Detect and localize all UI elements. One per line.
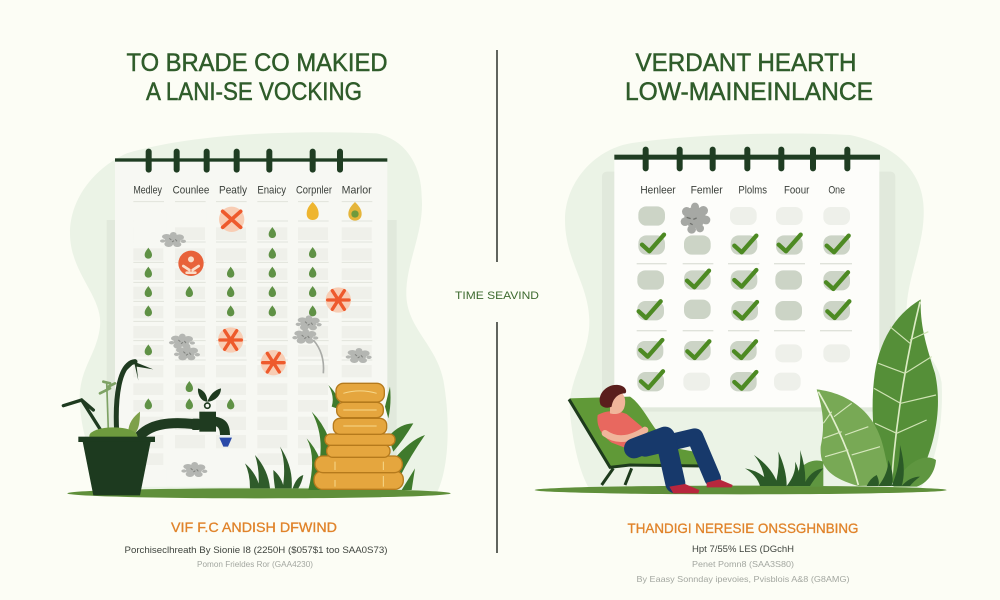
calendar column headings — [133, 185, 372, 197]
grass tufts — [745, 445, 920, 486]
title: left panel — [126, 49, 388, 106]
potted plant — [63, 361, 155, 495]
caption: left panel: Pomon Frieldes Ror (GAA4230) — [197, 559, 313, 569]
calendar column headings: Femler — [691, 185, 723, 197]
calendar column headings: One — [828, 185, 845, 197]
ground — [535, 486, 947, 494]
grey weed on calendar — [681, 203, 710, 234]
calendar page — [115, 160, 387, 487]
background blob — [70, 132, 448, 493]
panel: right low-maintenance scene — [535, 133, 947, 494]
yellow warning drops — [307, 202, 362, 221]
calendar column headings: Foour — [784, 185, 810, 197]
reclining person on lounger — [569, 385, 733, 493]
neck and face — [610, 392, 625, 414]
shirt — [597, 411, 645, 448]
grass tuft — [245, 447, 303, 488]
title: right panel — [625, 49, 873, 106]
calendar spiral bar — [115, 149, 387, 173]
title: left panel: TO BRADE CO MAKIED — [126, 49, 388, 77]
calendar column headings: Corpnler — [296, 185, 332, 197]
centre label: TIME SEAVIND — [455, 290, 539, 302]
title: left panel: A LANI-SE VOCKING — [146, 78, 362, 106]
calendar back sheet — [107, 220, 397, 483]
water tap and pipe — [138, 388, 233, 447]
stack of coins — [314, 383, 403, 489]
row dividers — [637, 264, 852, 331]
calendar column headings: Medley — [133, 185, 162, 197]
calendar column headings: Counlee — [173, 185, 209, 197]
water drops — [145, 227, 316, 409]
calendar page — [614, 157, 879, 407]
calendar grid cells — [133, 202, 375, 487]
calendar column headings: Plolms — [738, 185, 767, 197]
low bush — [793, 457, 936, 487]
small leaf — [817, 389, 892, 486]
lounger cushion — [569, 397, 704, 468]
centre divider — [496, 50, 498, 553]
green check marks — [639, 235, 849, 389]
calendar column headings: Peatly — [219, 185, 247, 197]
grass behind coins — [307, 385, 425, 490]
calendar spiral bar — [614, 147, 880, 171]
calendar back sheet — [602, 172, 895, 412]
caption: left panel: VIF F.C ANDISH DFWIND — [171, 520, 337, 535]
caption: right panel: Hpt 7/55% LES (DGchH — [692, 544, 794, 555]
calendar column headings: Henleer — [640, 185, 676, 197]
lounger frame — [569, 399, 703, 485]
shoes — [669, 479, 733, 493]
caption: right panel: By Eaasy Sonnday ipevoies, Pvisblois A&8 (G8AMG) — [636, 574, 850, 584]
caption: right panel: Penet Pomn8 (SAA3S80) — [692, 559, 794, 569]
orange warning badge — [178, 251, 204, 276]
missed watering markers — [218, 207, 351, 375]
background blob — [565, 133, 942, 490]
task status cells — [637, 206, 850, 391]
title: right panel: VERDANT HEARTH — [636, 49, 856, 77]
caption: left panel — [124, 520, 388, 569]
arm — [605, 430, 645, 439]
calendar column headings: Enaicy — [257, 185, 286, 197]
caption: right panel: THANDIGI NERESIE ONSSGHNBING — [628, 521, 858, 536]
trousers — [634, 437, 713, 483]
caption: left panel: Porchiseclhreath By Sionie I8 (2250H ($057$1 too SAA0S73) — [124, 545, 388, 556]
grey weeds — [160, 232, 372, 477]
big leaf — [873, 299, 938, 485]
caption: right panel — [628, 521, 858, 584]
hair — [600, 385, 626, 408]
ground — [67, 488, 451, 498]
panel: left high-maintenance scene — [63, 132, 451, 498]
calendar column headings: Marlor — [342, 185, 372, 197]
title: right panel: LOW-MAINEINLANCE — [625, 78, 873, 106]
calendar column headings — [640, 185, 845, 197]
